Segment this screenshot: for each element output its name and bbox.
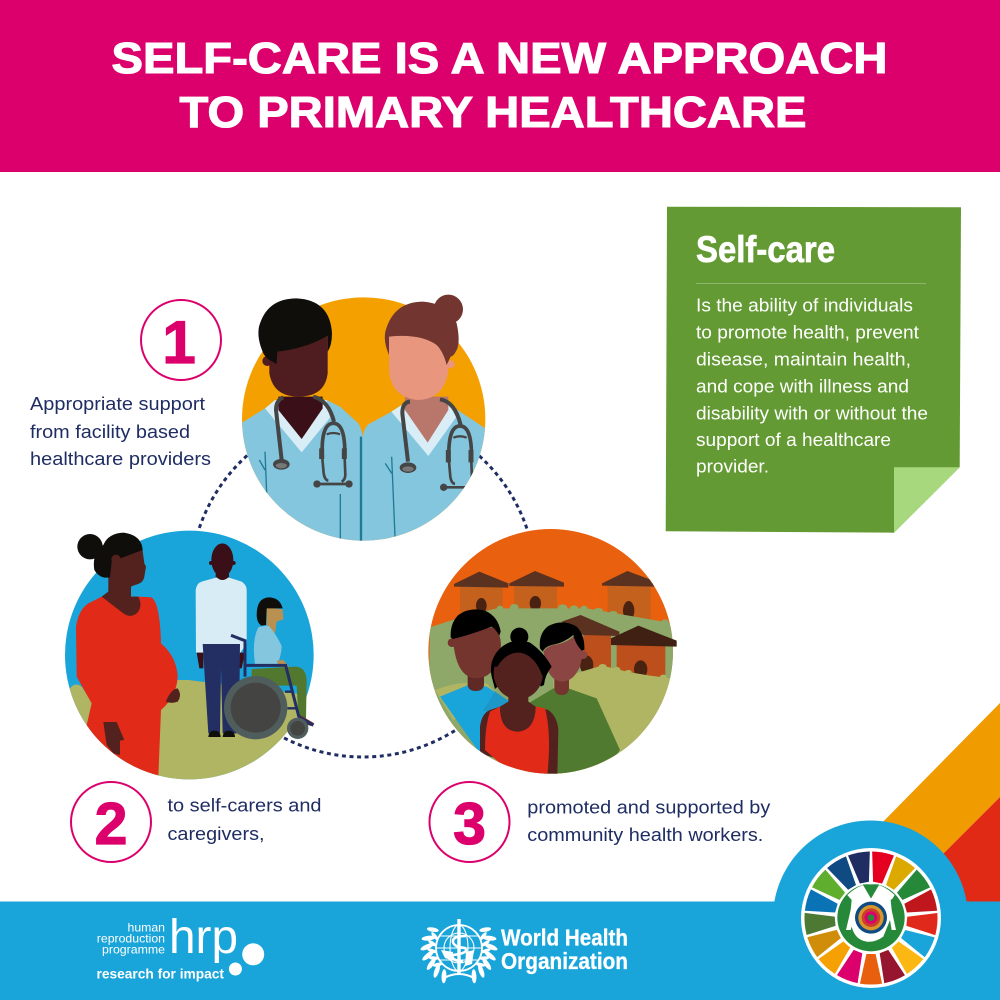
step 1 text: Appropriate support (30, 394, 205, 414)
note body text: support of a healthcare (696, 430, 891, 450)
step 2 text: to self-carers and (168, 796, 322, 816)
note body text (696, 295, 928, 477)
HRP logo: human (128, 921, 165, 935)
step 3 badge: 3 (453, 791, 486, 857)
front huts (562, 615, 665, 678)
person left head (448, 609, 501, 678)
footer band (0, 820, 1000, 1000)
illustration: healthcare providers (237, 295, 490, 545)
icon: SDG wheel (801, 848, 941, 988)
title: SELF-CARE IS A NEW APPROACH (112, 35, 888, 83)
step 1 badge: 1 (162, 309, 196, 376)
step 2 badge (71, 782, 151, 862)
step 1 badge (141, 300, 221, 380)
step 2 badge: 2 (95, 791, 127, 857)
step 1 text: from facility based (30, 422, 190, 442)
title (112, 35, 888, 137)
WHO wordmark (501, 925, 628, 974)
stethoscope right (402, 399, 475, 487)
dotted connector circle (190, 411, 536, 757)
illustration: community health workers (427, 529, 677, 787)
step 1 text (30, 394, 211, 469)
HRP logo (96, 911, 264, 982)
HRP logo: programme (102, 942, 165, 956)
title: TO PRIMARY HEALTHCARE (180, 89, 806, 137)
wheel centre emblem (837, 884, 905, 951)
step 3 badge (430, 782, 510, 862)
illustration: self-carers and caregivers (62, 531, 322, 783)
note body text: provider. (696, 457, 769, 477)
back huts (454, 571, 656, 622)
person left body (440, 685, 510, 760)
icon: WHO emblem (420, 919, 498, 983)
step 2 text: caregivers, (168, 824, 264, 844)
person right body (528, 688, 620, 775)
WHO wordmark: World Health (501, 925, 628, 951)
step 3 text (527, 797, 770, 845)
note body text: Is the ability of individuals (696, 295, 913, 315)
person center body (480, 707, 558, 777)
step 3 text: promoted and supported by (527, 797, 770, 817)
panel: self-care definition note (666, 207, 961, 533)
note body text: disability with or without the (696, 403, 928, 423)
note body text: to promote health, prevent (696, 322, 919, 342)
pregnant woman head (102, 548, 180, 703)
step 2 text (168, 796, 322, 844)
male doctor head (258, 298, 332, 397)
HRP logo: research for impact (96, 967, 225, 982)
WHO logo (420, 919, 628, 983)
note body text: disease, maintain health, (696, 349, 911, 369)
note heading: Self-care (696, 229, 835, 270)
step 3 text: community health workers. (527, 825, 763, 845)
standing man (196, 543, 247, 737)
decorative diagonal stripes (870, 703, 1000, 902)
HRP logo: reproduction (97, 932, 165, 946)
stethoscope left (276, 397, 349, 484)
step 1 text: healthcare providers (30, 449, 211, 469)
pregnant woman dress (76, 597, 178, 780)
HRP logo: hrp (169, 911, 238, 964)
header banner (0, 0, 1000, 172)
person right head (540, 622, 587, 682)
female doctor head (385, 295, 463, 400)
front hut roof overhanging the circle (611, 626, 677, 647)
woman in wheelchair (224, 597, 314, 739)
WHO wordmark: Organization (501, 948, 628, 974)
person center head (491, 628, 552, 732)
note body text: and cope with illness and (696, 376, 909, 396)
